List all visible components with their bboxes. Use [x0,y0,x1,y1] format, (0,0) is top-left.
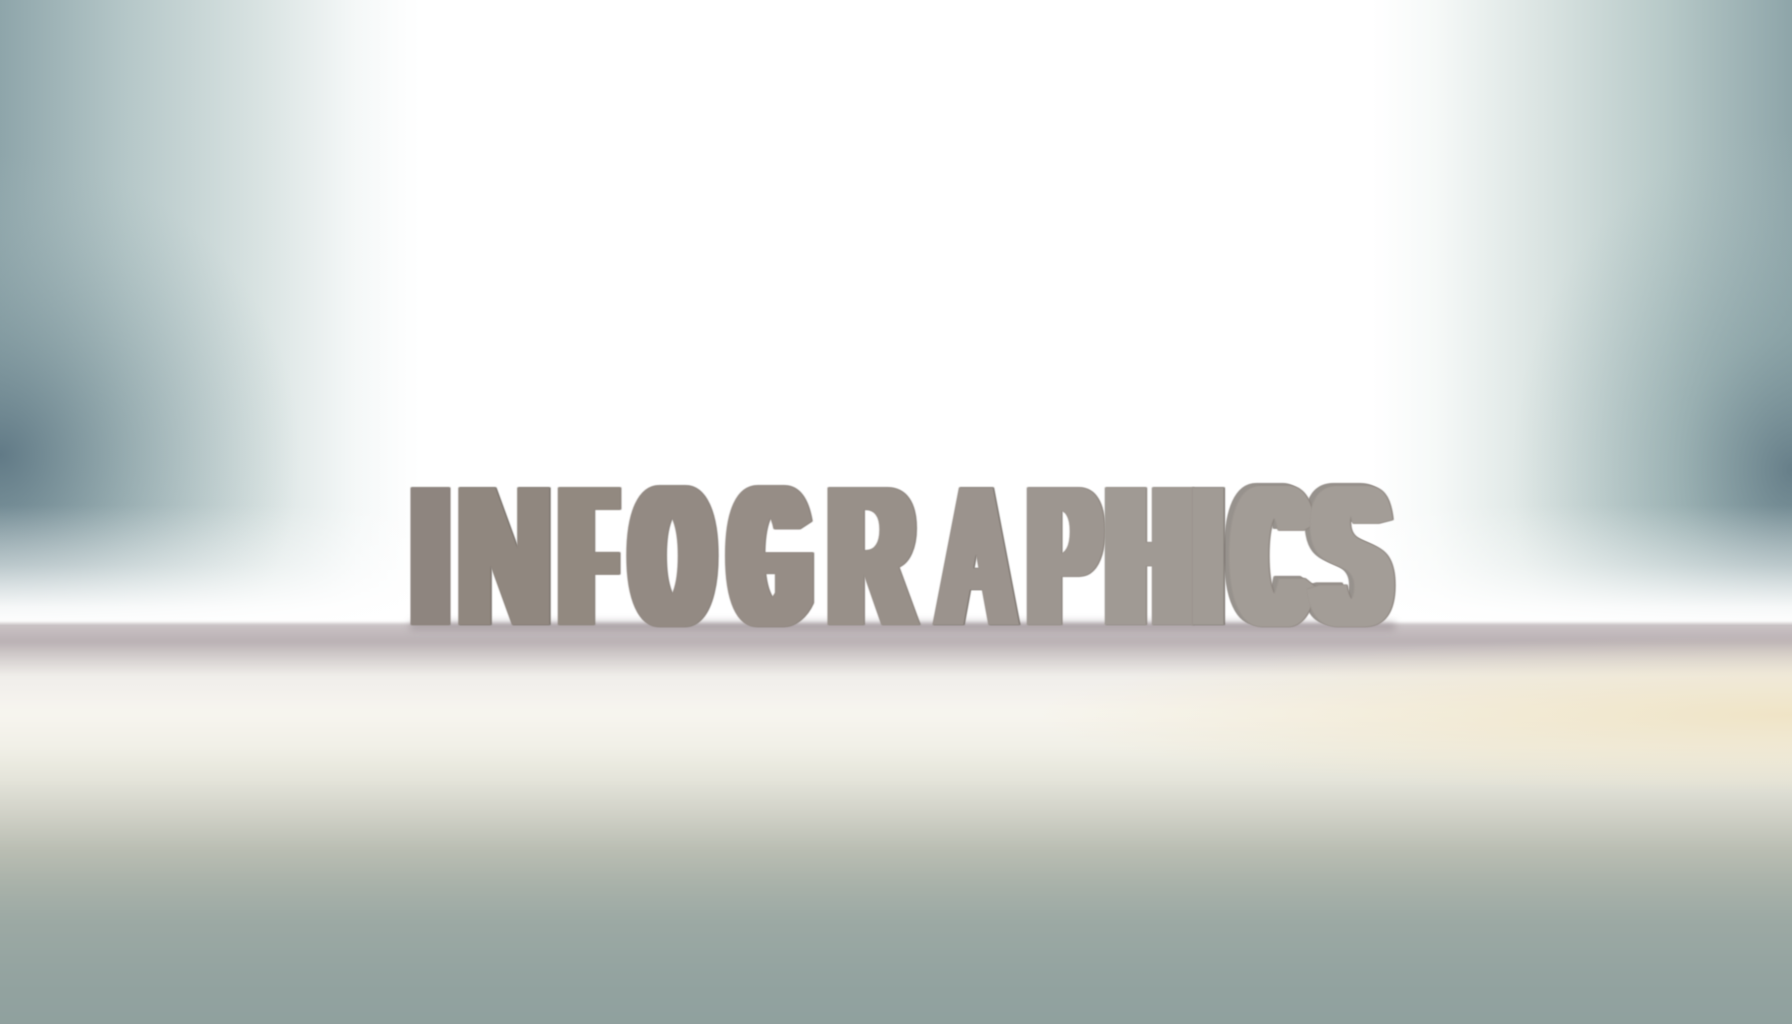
letter N: N [458,444,550,668]
background: left wall glow [0,0,420,755]
letter H: H [1111,444,1187,667]
title: INFOGRAPHICS [417,442,1386,669]
letter A: A [938,444,1014,667]
contact shadow under title [410,622,1395,630]
letter O: O [635,446,709,669]
background: right wall glow [1372,0,1792,810]
letter P: P [1030,444,1098,668]
letter depth: C and S side faces [1233,442,1381,667]
letter I: I [1193,445,1223,668]
background: horizon light band [0,505,1792,625]
letter depth: C and S side faces: C [1233,444,1301,667]
letter G: G [734,444,806,667]
floor [0,623,1792,1024]
letter R: R [830,446,912,668]
letter depth: C and S side faces: S [1311,442,1381,666]
letter S: S [1316,444,1386,668]
letter F: F [566,444,610,668]
letter C: C [1238,446,1306,669]
letter I: I [417,444,443,668]
